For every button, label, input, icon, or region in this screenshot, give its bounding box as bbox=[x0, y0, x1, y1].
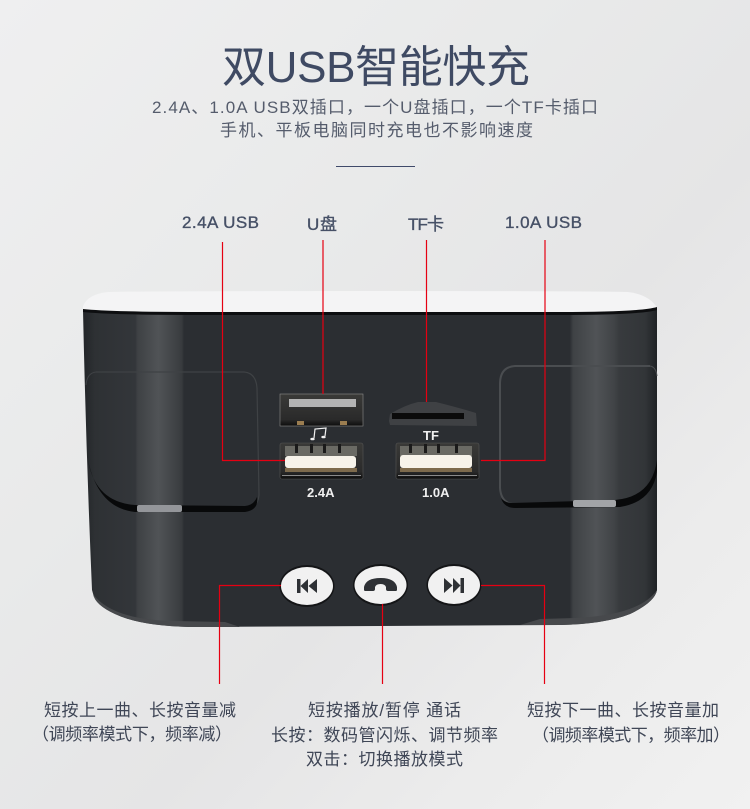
caption: previous button: （调频率模式下，频率减） bbox=[32, 725, 232, 744]
USB 1.0A port bbox=[396, 443, 479, 479]
button: previous bbox=[280, 565, 334, 607]
label: TF: TF bbox=[423, 428, 439, 443]
USB 2.4A port bbox=[280, 443, 363, 479]
icon: music note bbox=[310, 428, 326, 440]
button: call bbox=[353, 564, 408, 606]
button: next bbox=[426, 564, 482, 606]
USB music port bbox=[280, 394, 363, 426]
callout lines bbox=[220, 240, 545, 684]
caption: next button: （调频率模式下，频率加） bbox=[532, 726, 730, 745]
port labels bbox=[182, 213, 582, 234]
caption: previous button: 短按上一曲、长按音量减 bbox=[44, 701, 236, 720]
device: charger body bbox=[83, 291, 657, 627]
caption: next button bbox=[527, 701, 730, 745]
port labels: 2.4A USB bbox=[182, 213, 259, 232]
TF card slot bbox=[389, 402, 477, 426]
subtitle text: 2.4A、1.0A USB双插口，一个U盘插口，一个TF卡插口 bbox=[152, 98, 598, 117]
label: 1.0A: 1.0A bbox=[422, 485, 450, 500]
label: 2.4A: 2.4A bbox=[307, 485, 335, 500]
title: 双USB智能快充 bbox=[222, 43, 530, 92]
bottom rim right bbox=[520, 590, 657, 625]
caption: previous button bbox=[32, 701, 236, 744]
white top surface bbox=[83, 291, 657, 312]
black body bbox=[83, 308, 657, 627]
port labels: 1.0A USB bbox=[505, 213, 582, 232]
caption: call button: 双击：切换播放模式 bbox=[306, 750, 463, 769]
subtitle text bbox=[152, 98, 598, 140]
caption: call button bbox=[271, 701, 498, 769]
bottom rim left bbox=[93, 594, 240, 627]
caption: next button: 短按下一曲、长按音量加 bbox=[527, 701, 719, 720]
left recess bbox=[96, 372, 259, 508]
port labels: TF卡 bbox=[408, 215, 444, 234]
caption: call button: 短按播放/暂停 通话 bbox=[308, 701, 461, 720]
right recess bbox=[500, 366, 650, 504]
port labels: U盘 bbox=[307, 215, 337, 234]
caption: call button: 长按：数码管闪烁、调节频率 bbox=[271, 726, 498, 745]
subtitle text: 手机、平板电脑同时充电也不影响速度 bbox=[220, 121, 533, 140]
